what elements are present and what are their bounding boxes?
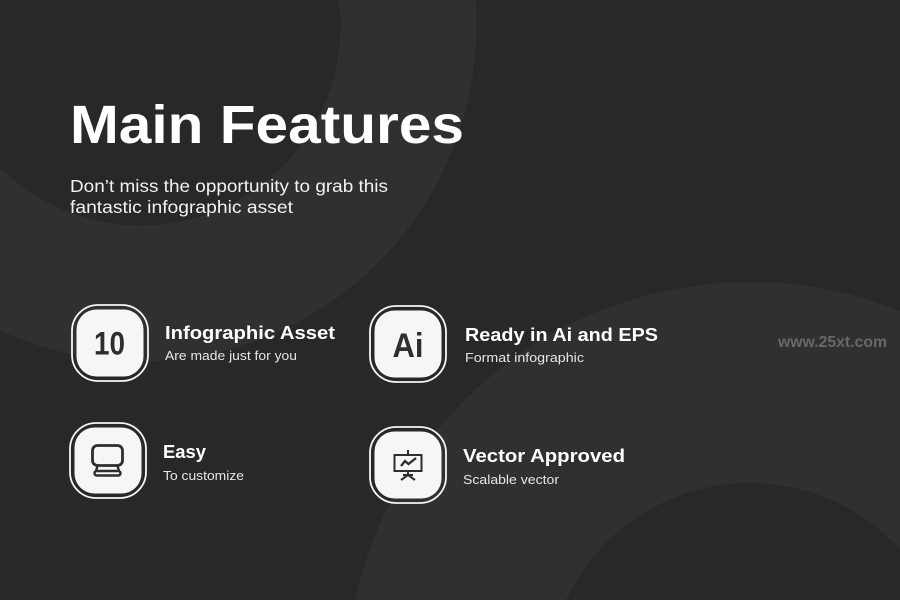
icon: number 10 (72, 305, 148, 381)
heading: Easy: Easy (163, 441, 207, 462)
subtitle (70, 176, 388, 217)
heading: Vector Approved: Vector Approved (463, 445, 625, 466)
feature: Infographic Asset (72, 305, 335, 381)
heading: Ready in Ai and EPS: Ready in Ai and EPS (465, 324, 658, 345)
icon: presentation board (370, 427, 446, 503)
icon: Ai (370, 306, 446, 382)
text: Scalable vector: Scalable vector (463, 473, 559, 487)
icon: Ai: Ai (392, 327, 424, 365)
feature: Vector Approved (370, 427, 625, 503)
text: To customize: To customize (163, 469, 244, 483)
background ring: top left (0, 0, 476, 361)
heading: Infographic Asset: Infographic Asset (165, 322, 335, 343)
feature: Ready in Ai and EPS (370, 306, 658, 382)
background ring: bottom right (355, 282, 900, 600)
subtitle: fantastic infographic asset (70, 197, 293, 217)
icon: monitor (70, 423, 146, 498)
text: Are made just for you: Are made just for you (165, 349, 297, 363)
subtitle: Don’t miss the opportunity to grab this (70, 176, 388, 196)
icon: number 10: 10 (94, 326, 125, 362)
watermark: www.25xt.com (777, 334, 887, 351)
feature: Easy (70, 423, 244, 498)
text: Format infographic: Format infographic (465, 351, 584, 365)
title: Main Features (70, 95, 464, 155)
